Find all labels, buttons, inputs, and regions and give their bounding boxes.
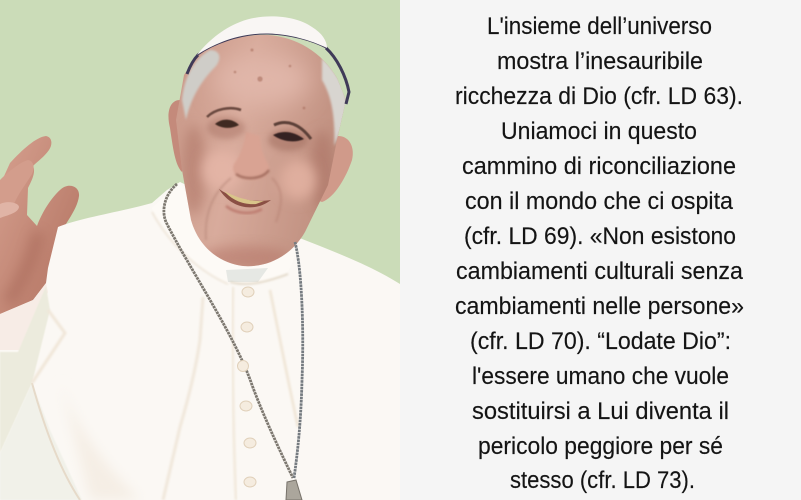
right hair [322,58,347,146]
nasolabial folds [206,178,231,240]
quote text: (cfr. LD 69). «Non esistono [464,223,736,250]
cassock buttons [238,287,256,487]
panel: photo background [0,0,400,500]
quote text: ricchezza di Dio (cfr. LD 63). [455,83,743,110]
cheek shadows [182,125,206,215]
left sleeve [0,286,50,453]
right ear [314,136,353,202]
white cassock and cape [0,180,400,500]
nose [233,151,268,175]
quote text: cambiamenti culturali senza [456,258,743,285]
forehead spots [234,48,305,109]
papal zucchetto [187,16,349,104]
left sleeve cuff [0,283,48,350]
eye sockets [207,117,245,139]
quote text: stesso (cfr. LD 73). [510,467,695,494]
quote text: cammino di riconciliazione [462,153,736,180]
portrait photo [0,16,400,500]
quote text: mostra l’inesauribile [497,48,703,75]
pectoral chain [164,184,303,478]
eyes [215,120,239,128]
quote text [455,13,744,494]
eyebrows [207,108,241,117]
quote text: l'essere umano che vuole [472,363,729,390]
forehead highlight [214,54,310,106]
cross pendant [286,480,302,500]
left hair [182,50,219,120]
quote text: Uniamoci in questo [501,118,697,145]
raised hand [0,136,79,318]
face [176,35,346,266]
quote text: L'insieme dell’universo [487,13,712,40]
collar [152,182,296,284]
quote text: sostituirsi a Lui diventa il [472,398,729,425]
quote text: con il mondo che ci ospita [465,188,733,215]
cape shading [32,383,80,500]
cheeks [198,152,237,187]
left ear [168,100,192,172]
quote text: cambiamenti nelle persone» [455,293,744,320]
quote text: pericolo peggiore per sé [478,433,723,460]
mouth [219,189,271,207]
panel: text background [400,0,801,500]
head [168,35,353,270]
quote text: (cfr. LD 70). “Lodate Dio”: [470,328,731,355]
